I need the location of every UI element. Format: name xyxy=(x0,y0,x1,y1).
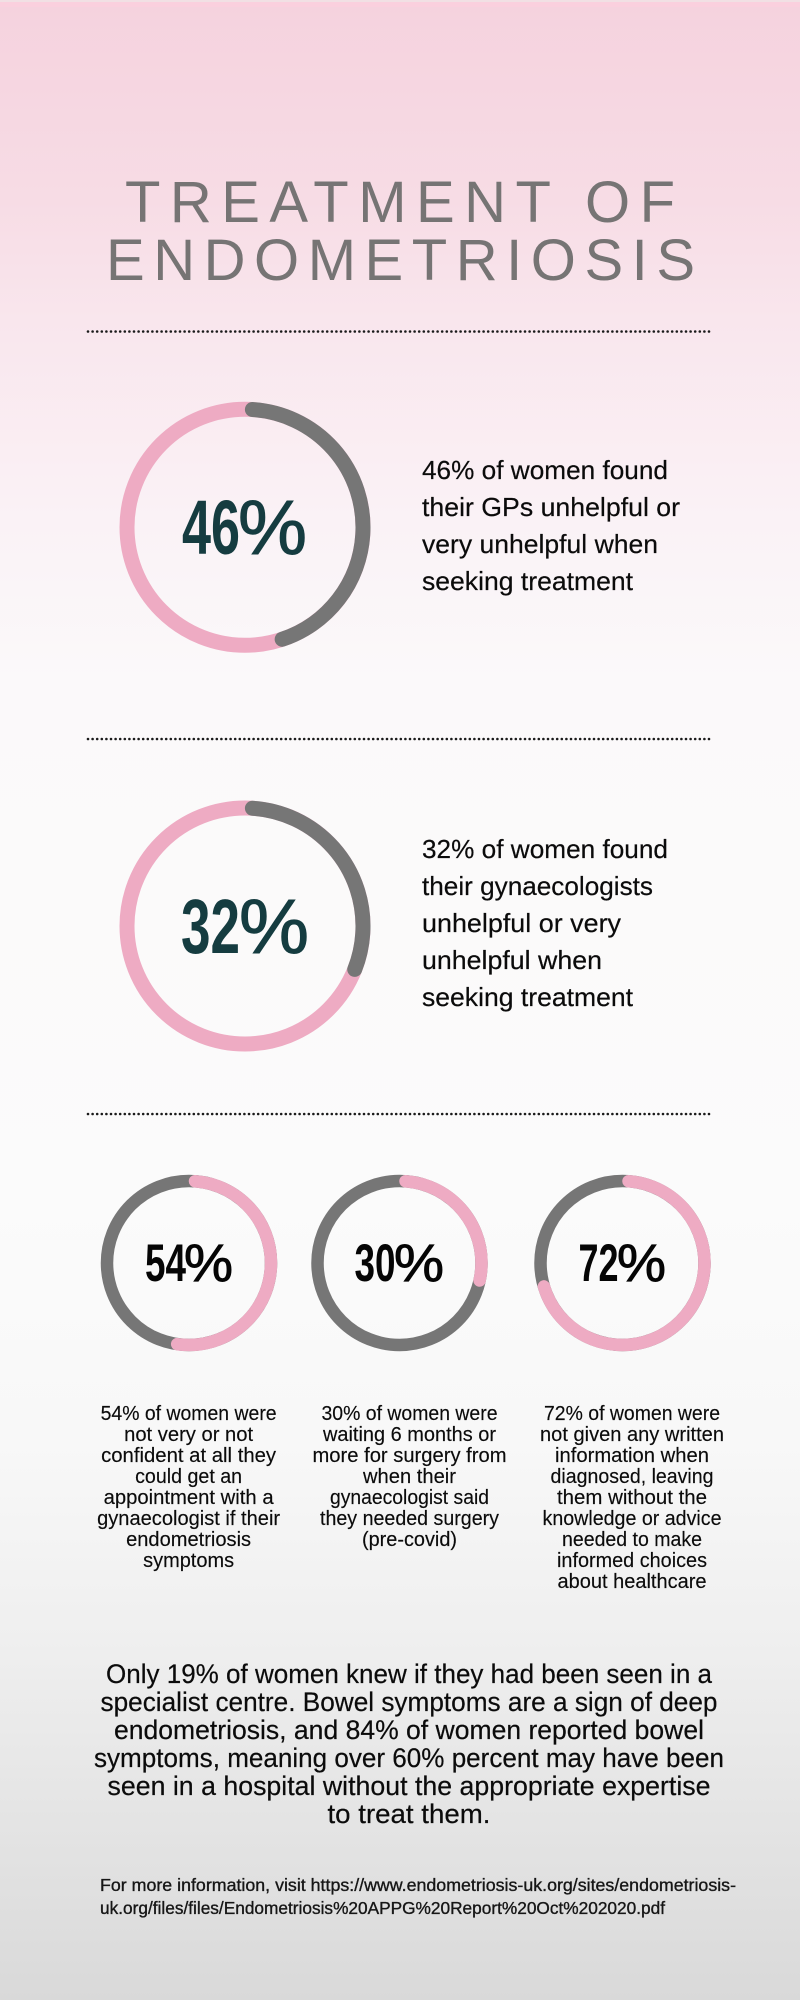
title: TREATMENT OF xyxy=(125,170,675,235)
text: source link: For more information, visit https://www.endometriosis-uk.org/sites/endometriosis- xyxy=(100,1875,736,1895)
donut chart: 32%: 32 xyxy=(181,884,240,970)
donut chart: 54%: 54 xyxy=(145,1234,186,1293)
donut chart: 54% xyxy=(101,1175,277,1351)
text: 30% description: (pre-covid) xyxy=(362,1529,457,1551)
text: 46% description: their GPs unhelpful or xyxy=(422,492,680,522)
text: 54% description: appointment with a xyxy=(104,1487,274,1509)
text: 46% description xyxy=(422,455,680,596)
donut chart: 46%: 46 xyxy=(182,485,240,571)
donut chart: 30% xyxy=(312,1175,487,1351)
text: 32% description: their gynaecologists xyxy=(422,871,653,901)
panel: 72% written information xyxy=(535,1175,724,1593)
text: specialist centre paragraph: seen in a hospital without the appropriate expertise xyxy=(108,1771,710,1801)
text: 54% description: confident at all they xyxy=(101,1445,276,1467)
text: specialist centre paragraph: to treat them. xyxy=(328,1799,490,1829)
text: 72% description: them without the xyxy=(557,1487,707,1509)
text: 54% description: 54% of women were xyxy=(101,1403,277,1425)
text: specialist centre paragraph xyxy=(94,1659,724,1829)
text: 54% description: not very or not xyxy=(124,1424,254,1446)
text: 72% description: not given any written xyxy=(540,1424,724,1446)
text: 54% description xyxy=(97,1403,280,1572)
donut chart: 46% xyxy=(120,402,370,652)
text: 72% description: informed choices xyxy=(557,1550,707,1572)
text: specialist centre paragraph: symptoms, meaning over 60% percent may have been xyxy=(94,1743,724,1773)
text: specialist centre paragraph: specialist centre. Bowel symptoms are a sign of deep xyxy=(100,1687,718,1717)
text: source link xyxy=(100,1875,736,1918)
text: 46% description: 46% of women found xyxy=(422,455,668,485)
text: 46% description: very unhelpful when xyxy=(422,529,658,559)
text: 32% description: seeking treatment xyxy=(422,982,634,1012)
text: 30% description: when their xyxy=(362,1466,456,1488)
panel: 32% gynaecologists xyxy=(120,801,668,1051)
text: 32% description xyxy=(422,834,668,1012)
text: 30% description: waiting 6 months or xyxy=(322,1424,496,1446)
text: source link: uk.org/files/files/Endometriosis%20APPG%20Report%20Oct%202020.pdf xyxy=(100,1898,665,1918)
text: 72% description xyxy=(540,1403,724,1593)
text: 32% description: unhelpful when xyxy=(422,945,602,975)
text: 32% description: unhelpful or very xyxy=(422,908,621,938)
text: 32% description: 32% of women found xyxy=(422,834,668,864)
text: 54% description: could get an xyxy=(135,1466,242,1488)
text: 30% description: they needed surgery xyxy=(320,1508,499,1530)
text: 46% description: seeking treatment xyxy=(422,566,634,596)
title xyxy=(106,170,695,293)
text: 54% description: symptoms xyxy=(143,1550,234,1572)
donut chart: 30%: % xyxy=(394,1234,444,1293)
text: 72% description: about healthcare xyxy=(558,1571,706,1593)
title: ENDOMETRIOSIS xyxy=(106,228,695,293)
text: 30% description xyxy=(312,1403,506,1551)
panel: 46% GPs xyxy=(120,402,680,652)
text: 54% description: gynaecologist if their xyxy=(97,1508,280,1530)
text: specialist centre paragraph: Only 19% of women knew if they had been seen in a xyxy=(106,1659,712,1689)
donut chart: 32%: % xyxy=(239,884,309,970)
donut chart: 54%: % xyxy=(184,1234,233,1293)
donut chart: 30%: 30 xyxy=(354,1234,396,1293)
donut chart: 72%: % xyxy=(617,1234,666,1293)
text: 30% description: gynaecologist said xyxy=(330,1487,489,1509)
text: 72% description: information when xyxy=(555,1445,709,1467)
text: 72% description: diagnosed, leaving xyxy=(550,1466,714,1488)
donut chart: 46%: % xyxy=(238,485,307,571)
donut chart: 72% xyxy=(535,1175,710,1351)
text: 30% description: 30% of women were xyxy=(322,1403,498,1425)
text: 30% description: more for surgery from xyxy=(312,1445,506,1467)
text: 72% description: needed to make xyxy=(562,1529,702,1551)
panel: 54% appointment xyxy=(97,1175,280,1572)
text: 72% description: 72% of women were xyxy=(544,1403,720,1425)
text: 54% description: endometriosis xyxy=(126,1529,251,1551)
donut chart: 32% xyxy=(120,801,370,1051)
text: specialist centre paragraph: endometriosis, and 84% of women reported bowel xyxy=(114,1715,704,1745)
text: 72% description: knowledge or advice xyxy=(542,1508,722,1530)
panel: 30% surgery wait xyxy=(312,1175,506,1551)
donut chart: 72%: 72 xyxy=(578,1234,618,1293)
